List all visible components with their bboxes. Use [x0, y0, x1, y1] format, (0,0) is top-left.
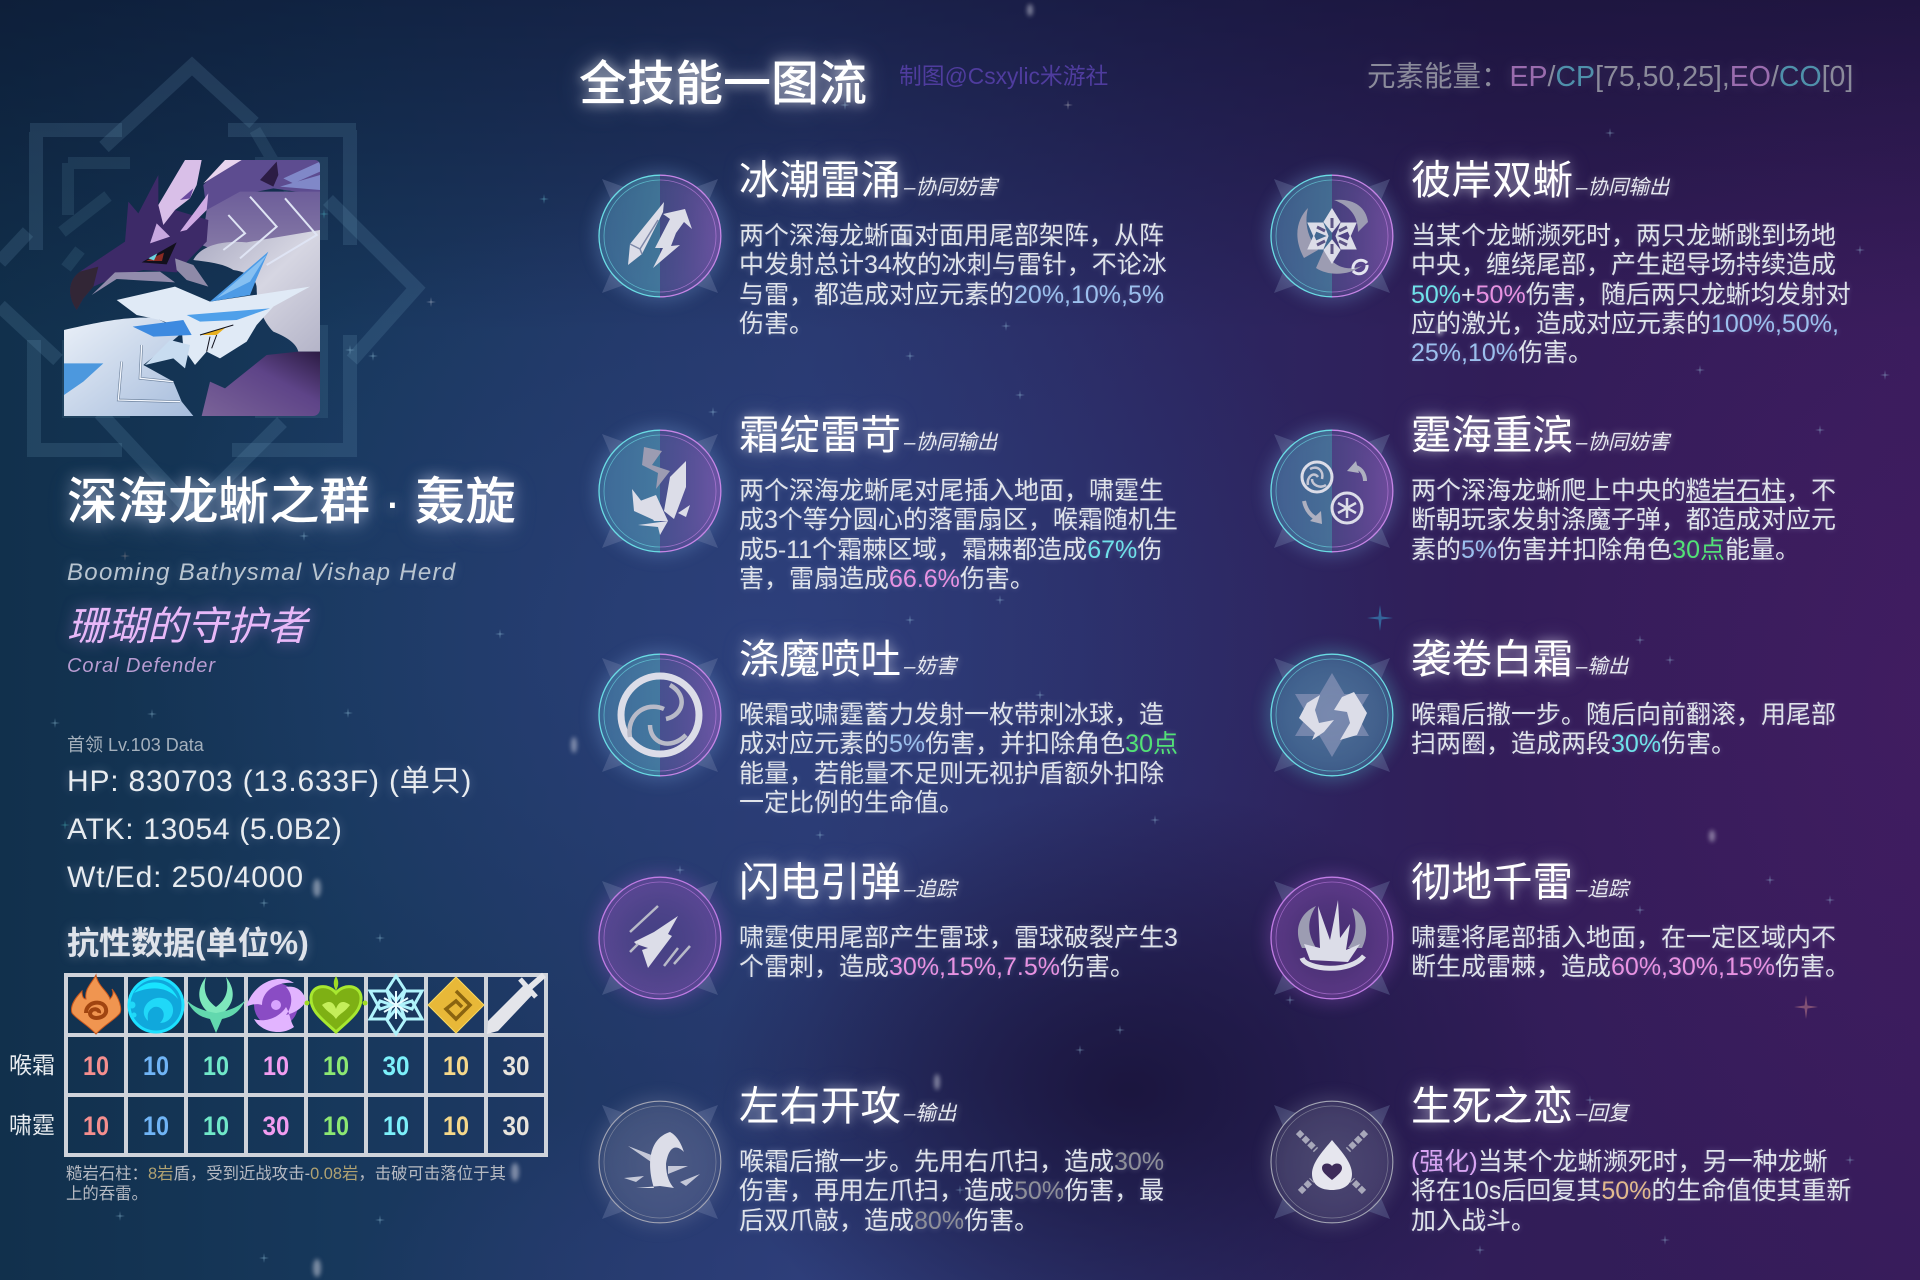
boss name: 深海龙蜥之群 · 轰旋: [67, 473, 516, 530]
skill description: 啸霆将尾部插入地面，在一定区域内不: [1411, 924, 1836, 952]
icon: anemo: [186, 977, 246, 1033]
boss english name: Booming Bathysmal Vishap Herd: [67, 559, 456, 586]
skill description: 断朝玩家发射涤魔子弹，都造成对应元: [1411, 506, 1836, 534]
skill: 霜绽雷苛: [590, 408, 1178, 1216]
boss title: 珊瑚的守护者: [67, 605, 307, 649]
skill: 冰潮雷涌: [589, 153, 1167, 338]
skill description: 成对应元素的5%伤害，并扣除角色30点: [739, 730, 1178, 758]
icon: cryo: [370, 976, 422, 1034]
resistance values: row 2: 10: [443, 1111, 469, 1141]
icon: white swirl on star: [1260, 642, 1404, 788]
skill description: [1411, 924, 1850, 983]
skill description: 25%,10%伤害。: [1411, 339, 1593, 367]
boss stats: [66, 735, 472, 894]
main title: 全技能一图流: [579, 58, 867, 111]
skill description: 成5-11个霜棘区域，霜棘都造成67%伤: [739, 536, 1162, 564]
resistance values: row 2: 30: [262, 1111, 290, 1141]
icon: ice shard and lightning: [589, 164, 731, 306]
icon: snowflake swirl: [1260, 164, 1404, 308]
icon: pyro: [71, 975, 121, 1034]
skill description: 两个深海龙蜥尾对尾插入地面，啸霆生: [739, 477, 1164, 505]
skill description: 两个深海龙蜥爬上中央的糙岩石柱，不: [1411, 477, 1836, 505]
purple dragon body: [70, 160, 320, 352]
resistance values: row 1: 10: [263, 1051, 289, 1081]
skill description: 中央，缠绕尾部，产生超导场持续造成: [1411, 251, 1836, 279]
boss english title: Coral Defender: [67, 655, 216, 677]
resistance values: row 2: [83, 1111, 530, 1141]
table footnote: 上的吞雷。: [66, 1185, 148, 1203]
skill name: 霆海重滨–协同妨害: [1411, 412, 1669, 458]
skill description: 能量，若能量不足则无视护盾额外扣除: [739, 760, 1164, 788]
skill description: [739, 700, 1178, 817]
row labels: 啸霆: [9, 1112, 55, 1138]
skill name: 彻地千雷–追踪: [1411, 859, 1628, 905]
skill description: 啸霆使用尾部产生雷球，雷球破裂产生3: [739, 924, 1178, 952]
skill description: 当某个龙蜥濒死时，两只龙蜥跳到场地: [1411, 222, 1836, 250]
skill description: 伤害，再用左爪扫，造成50%伤害，最: [739, 1177, 1164, 1205]
level label: 首领 Lv.103 Data: [67, 735, 204, 755]
skill description: [1411, 476, 1836, 564]
skill description: [739, 222, 1167, 338]
skill name: 袭卷白霜–输出: [1411, 636, 1628, 682]
skill description: 一定比例的生命值。: [739, 789, 964, 817]
resistance values: row 2: 10: [323, 1111, 349, 1141]
resistance values: row 1: 10: [323, 1051, 349, 1081]
resistance values: row 1: 10: [143, 1051, 169, 1081]
author credit: 制图@Csxylic米游社: [899, 63, 1108, 89]
resistance values: row 2: 10: [143, 1111, 169, 1141]
skill description: 喉霜后撤一步。随后向前翻滚，用尾部: [1411, 701, 1836, 729]
resistance values: row 1: 10: [83, 1051, 109, 1081]
icon: swapping elements: [1261, 420, 1404, 562]
skill description: [1411, 1148, 1851, 1236]
icon: lightning bolts: [590, 868, 730, 1008]
icon: dendro: [304, 976, 368, 1032]
skill: 生死之恋: [1257, 1078, 1867, 1264]
icon: electro: [246, 979, 306, 1032]
icon: geo: [428, 977, 484, 1033]
row labels: [9, 1052, 55, 1138]
resistance heading: 抗性数据(单位%): [67, 925, 309, 961]
skill name: 生死之恋–回复: [1411, 1083, 1628, 1129]
resistance values: row 1: 30: [382, 1051, 410, 1081]
skill: 霆海重滨: [1261, 408, 1836, 564]
skill name: 霜绽雷苛–协同输出: [739, 412, 997, 458]
skill description: 成3个等分圆心的落雷扇区，喉霜随机生: [739, 506, 1178, 534]
skill: 左右开攻: [592, 1080, 1164, 1235]
emblem: faded knot behind portrait: [0, 56, 426, 522]
skill name: 涤魔喷吐–妨害: [739, 636, 956, 682]
skill description: 两个深海龙蜥面对面用尾部架阵，从阵: [739, 222, 1164, 250]
resistance values: row 2: 10: [203, 1111, 229, 1141]
icon: hydro: [128, 978, 183, 1032]
skill description: 伤害。: [739, 310, 814, 338]
skill description: 加入战斗。: [1411, 1207, 1536, 1235]
lower purple limb: [202, 352, 320, 416]
stat: weight and endurance: Wt/Ed: 250/4000: [67, 861, 304, 894]
stat: hp: HP: 830703 (13.633F) (单只): [67, 765, 472, 798]
skill description: 后双爪敲，造成80%伤害。: [739, 1207, 1039, 1235]
skill description: 将在10s后回复其50%的生命值使其重新: [1411, 1177, 1851, 1205]
skill: 闪电引弹: [590, 856, 1178, 1008]
skill name: 闪电引弹–追踪: [739, 859, 956, 905]
resistance values: row 2: 10: [83, 1111, 109, 1141]
icon: physical sword: [487, 975, 544, 1034]
skill description: 应的激光，造成对应元素的100%,50%,: [1411, 310, 1839, 338]
portrait: two vishap dragons: [64, 160, 320, 416]
skill: 彻地千雷: [1257, 854, 1867, 1013]
resistance values: row 2: 30: [502, 1111, 530, 1141]
skill description: [739, 924, 1178, 981]
table footnote: 糙岩石柱：8岩盾，受到近战攻击-0.08岩，击破可击落位于其: [66, 1165, 506, 1183]
resistance values: row 1: 10: [443, 1051, 469, 1081]
resistance values: row 1: [83, 1051, 530, 1081]
skill description: [1410, 222, 1851, 367]
resistance values: row 1: 30: [502, 1051, 530, 1081]
icon: drop with heart and chains: [1257, 1087, 1407, 1237]
energy note: 元素能量：EP/CP[75,50,25],EO/CO[0]: [1367, 61, 1853, 93]
skill name: 冰潮雷涌–协同妨害: [739, 157, 997, 203]
skill description: 害，雷扇造成66.6%伤害。: [739, 565, 1035, 593]
resistance values: row 2: 10: [383, 1111, 409, 1141]
skill description: 素的5%伤害并扣除角色30点能量。: [1411, 536, 1800, 564]
skill: 涤魔喷吐: [590, 632, 1178, 1188]
skill: 彼岸双蜥: [1260, 154, 1851, 1224]
skill description: 喉霜或啸霆蓄力发射一枚带刺冰球，造: [739, 701, 1164, 729]
skill description: 中发射总计34枚的冰刺与雷针，不论冰: [739, 251, 1167, 279]
resistance table: [64, 972, 548, 1157]
skill description: 50%+50%伤害，随后两只龙蜥均发射对: [1411, 281, 1851, 309]
skill description: 个雷刺，造成30%,15%,7.5%伤害。: [739, 953, 1135, 981]
icon: swirl ring: [590, 646, 730, 1188]
skill: 袭卷白霜: [1260, 632, 1836, 788]
skill description: 喉霜后撤一步。先用右爪扫，造成30%: [739, 1148, 1164, 1176]
skill description: 扫两圈，造成两段30%伤害。: [1411, 730, 1736, 758]
skill description: [739, 476, 1178, 593]
skill description: [1411, 701, 1836, 760]
skill description: 断生成雷棘，造成60%,30%,15%伤害。: [1411, 953, 1850, 981]
resistance values: row 1: 10: [203, 1051, 229, 1081]
skill description: [739, 1148, 1164, 1235]
icon: lightning and crystals: [590, 421, 730, 561]
row labels: 喉霜: [9, 1052, 55, 1078]
table footnote: [66, 1164, 506, 1203]
skill name: 左右开攻–输出: [739, 1083, 956, 1129]
white ice dragon: [64, 252, 310, 416]
icon: thunder spikes: [1257, 863, 1407, 1013]
stat: atk: ATK: 13054 (5.0B2): [67, 813, 343, 846]
icon: claw slash: [592, 1094, 728, 1230]
skill name: 彼岸双蜥–协同输出: [1411, 157, 1669, 203]
skill description: 与雷，都造成对应元素的20%,10%,5%: [739, 281, 1164, 309]
skill description: (强化)当某个龙蜥濒死时，另一种龙蜥: [1411, 1148, 1828, 1176]
